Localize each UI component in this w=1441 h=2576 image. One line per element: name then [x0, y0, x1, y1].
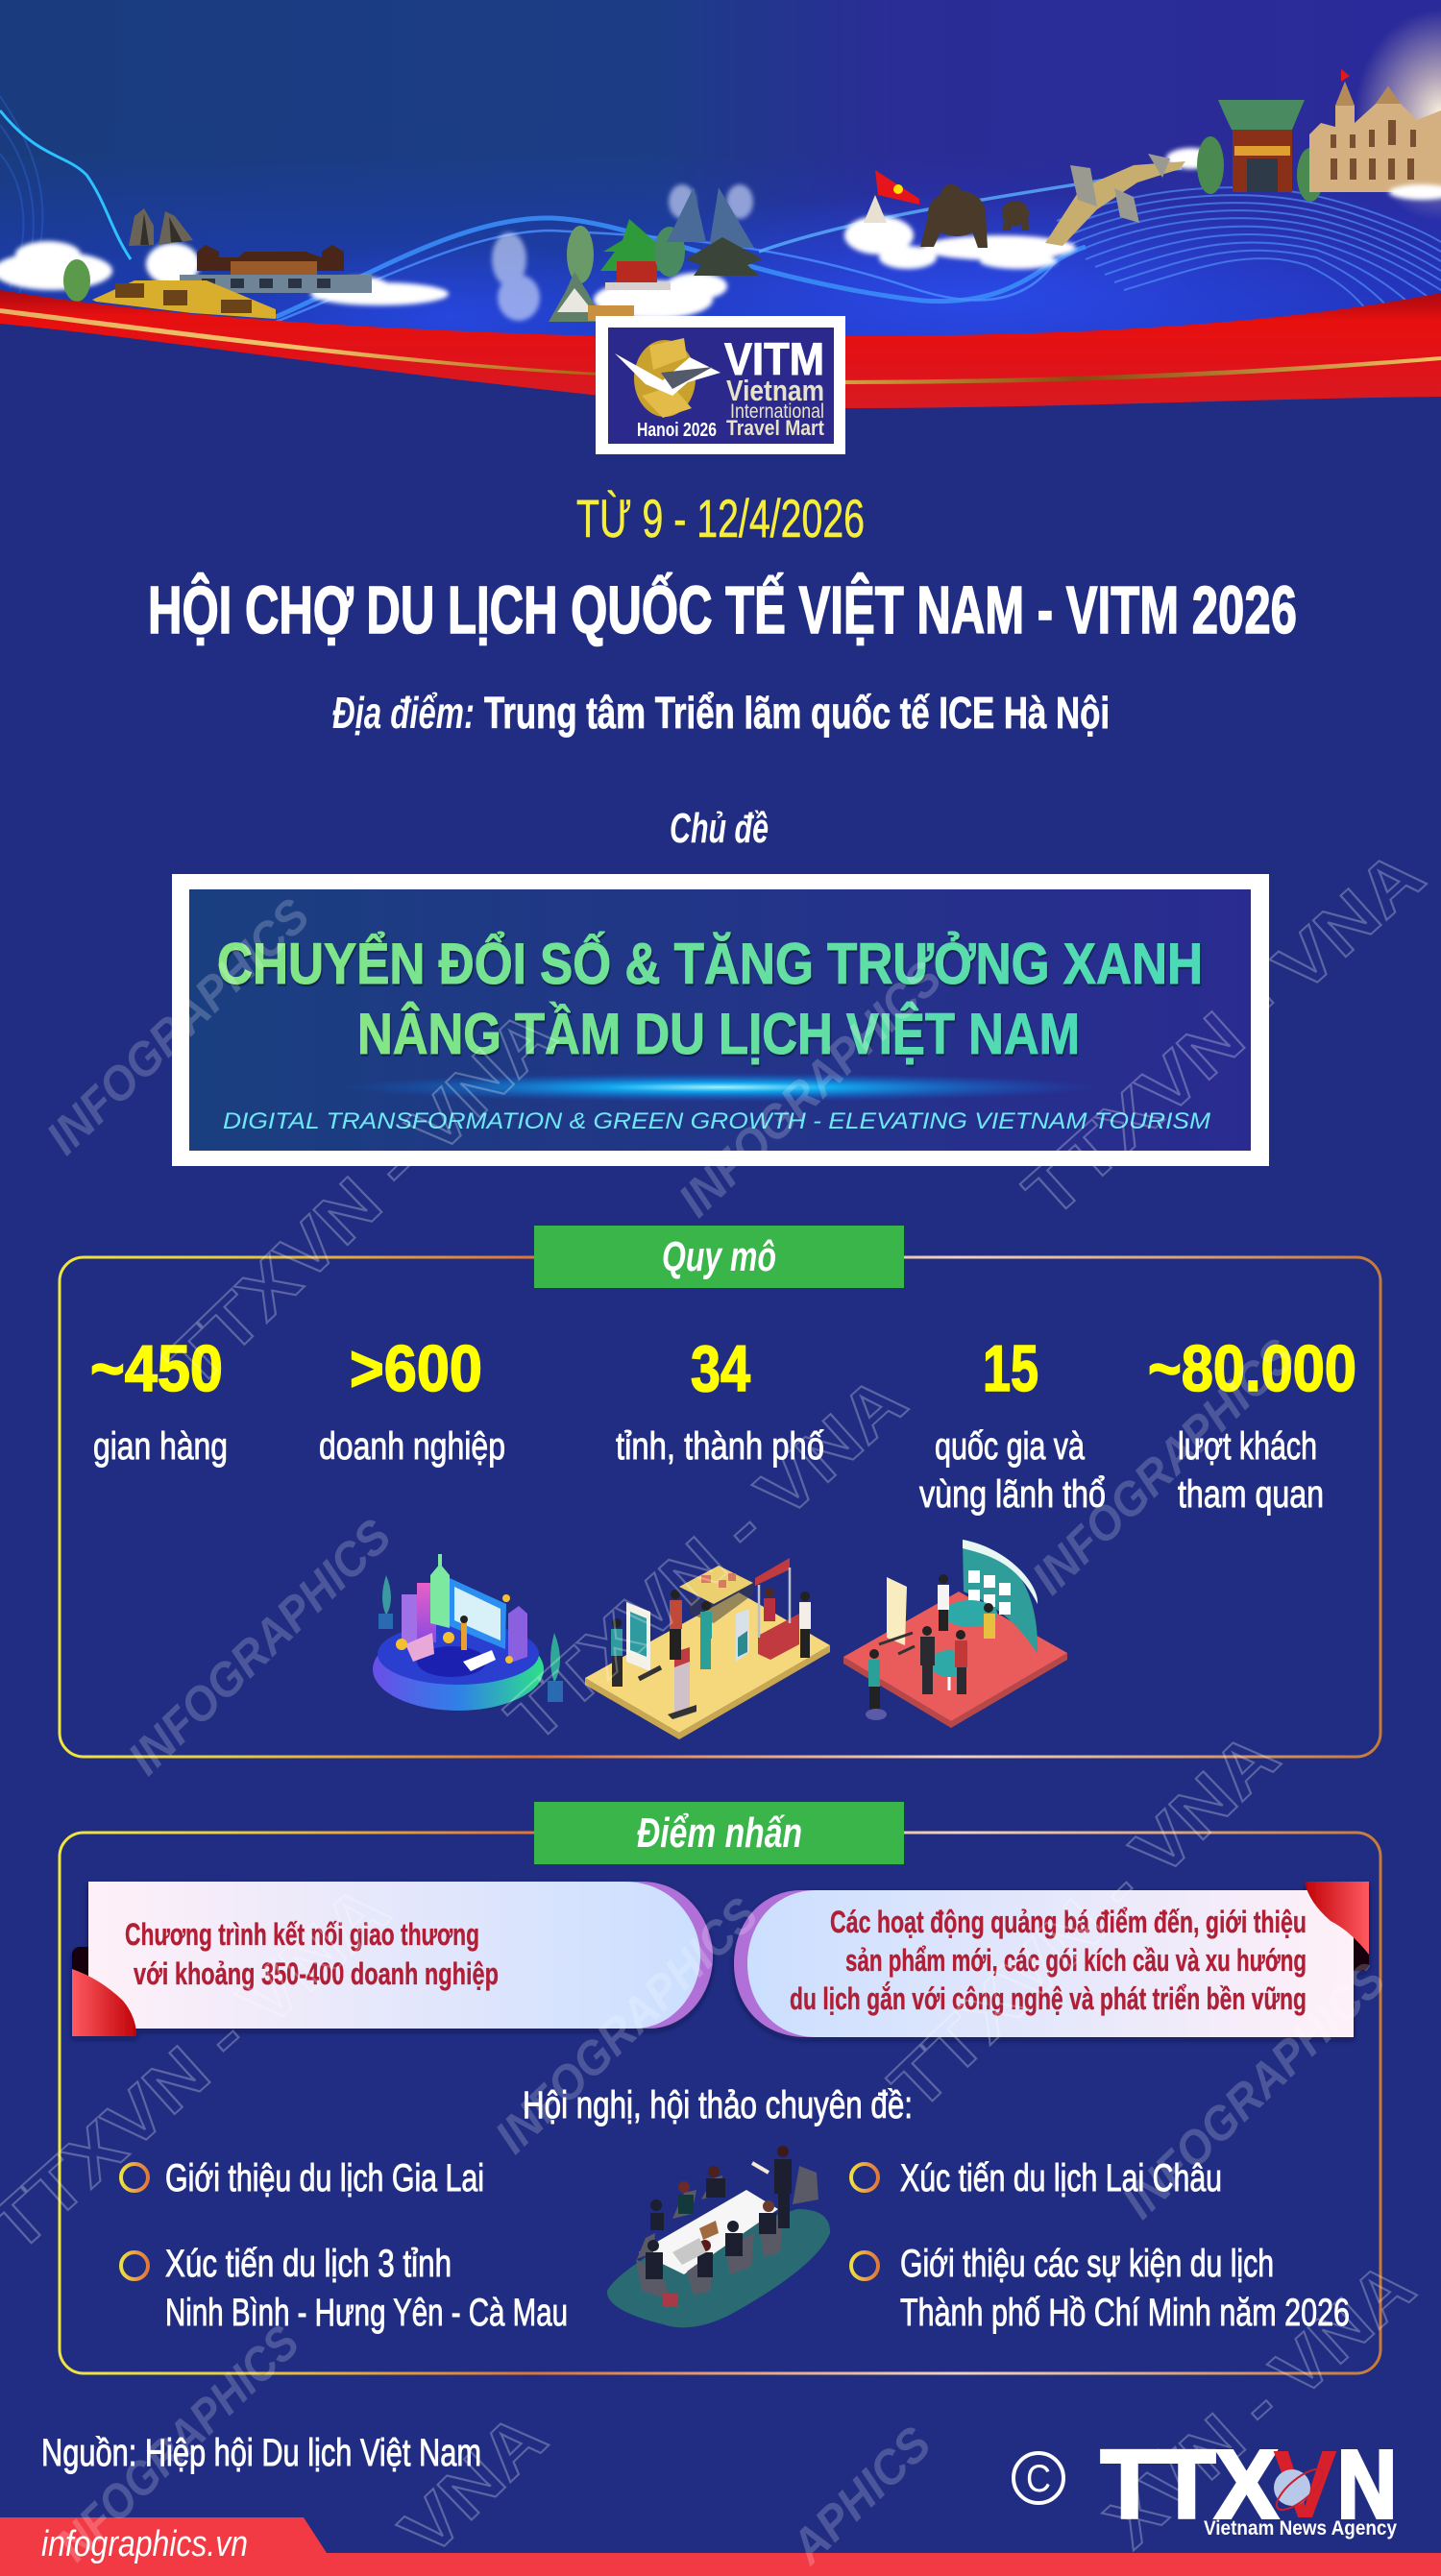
icon: meeting stand red — [843, 1540, 1067, 1728]
watermarks: XVN - VNA — [1090, 2246, 1429, 2563]
list item: Hồ Chí Minh: Giới thiệu các sự kiện du lịch — [900, 2243, 1274, 2285]
panel: theme box: NÂNG TẦM DU LỊCH VIỆT NAM — [357, 1002, 1080, 1066]
list item: 3 provinces — [121, 2243, 568, 2334]
source: Nguồn: Hiệp hội Du lịch Việt Nam — [41, 2432, 481, 2474]
VITM logo: Hanoi 2026 — [637, 420, 717, 441]
watermarks: TTXVN - VNA — [151, 994, 571, 1403]
callout: trade connection — [72, 1882, 713, 2036]
light beam — [341, 1073, 1100, 1102]
icon: gold swirl and bird — [615, 338, 720, 418]
icon: copyright — [1014, 2453, 1063, 2503]
TTXVN logo: Vietnam News Agency — [1204, 2517, 1397, 2540]
icon: exhibition stand yellow — [585, 1558, 830, 1739]
VITM logo: VITM — [724, 333, 824, 384]
VITM logo: International — [730, 401, 824, 423]
list item: Gia Lai — [121, 2157, 484, 2199]
venue — [332, 688, 1110, 738]
VITM logo: Travel Mart — [726, 416, 825, 440]
watermarks: TTXVN - VNA — [874, 1716, 1294, 2126]
heading: Quy mô: Quy mô — [662, 1233, 776, 1280]
stat: gian hàng — [90, 1332, 228, 1468]
panel: Điểm nhấn — [60, 1802, 1380, 2373]
footer band — [0, 2517, 1441, 2576]
clouds — [0, 148, 1216, 319]
gate — [1218, 100, 1305, 130]
stat: doanh nghiệp: >600 — [350, 1332, 482, 1405]
list item: Gia Lai: Giới thiệu du lịch Gia Lai — [165, 2157, 484, 2199]
watermarks: APHICS — [779, 2417, 941, 2575]
stat: lượt khách: lượt khách — [1178, 1425, 1317, 1468]
watermarks: INFOGRAPHICS — [37, 888, 320, 1165]
stat: quốc gia: vùng lãnh thổ — [919, 1473, 1106, 1516]
stat: doanh nghiệp — [319, 1332, 505, 1468]
list item: 3 provinces: Xúc tiến du lịch 3 tỉnh — [165, 2243, 452, 2285]
list item: Hồ Chí Minh — [851, 2243, 1350, 2334]
watermarks: TTXVN - VNA — [491, 1360, 921, 1758]
pagoda — [600, 219, 660, 271]
heading: Điểm nhấn — [534, 1802, 904, 1864]
list item: Lai Châu: Xúc tiến du lịch Lai Châu — [900, 2157, 1222, 2199]
flag — [875, 170, 919, 205]
icon: copyright: C — [1026, 2458, 1051, 2500]
stat: lượt khách: tham quan — [1178, 1473, 1324, 1516]
callout: trade connection: Chương trình kết nối giao thương — [125, 1917, 479, 1952]
heading: Quy mô — [534, 1226, 904, 1288]
watermarks: INFOGRAPHICS — [669, 951, 952, 1227]
panel: theme box: DIGITAL TRANSFORMATION & GREEN GROWTH - ELEVATING VIETNAM TOURISM — [223, 1108, 1210, 1134]
venue: Trung tâm Triển lãm quốc tế ICE Hà Nội — [484, 688, 1110, 738]
venue: Địa điểm: — [332, 688, 475, 738]
city hall — [1309, 82, 1441, 192]
rock islands — [129, 208, 193, 246]
elephants — [920, 184, 1029, 248]
icon: digital city disc — [373, 1554, 563, 1711]
stat: quốc gia: 15 — [983, 1332, 1038, 1405]
TTXVN logo: TTX — [1101, 2431, 1278, 2539]
twin towers — [667, 187, 754, 248]
date: TỪ 9 - 12/4/2026 — [576, 488, 865, 548]
stat: tỉnh, thành phố — [616, 1332, 824, 1468]
watermarks: INFOGRAPHICS — [118, 1509, 402, 1786]
VITM logo — [596, 316, 845, 454]
header banner illustration — [0, 0, 1441, 336]
golden bridge — [1045, 161, 1185, 246]
watermarks: INFOGRAPHICS — [1022, 1328, 1306, 1605]
heading: Điểm nhấn: Điểm nhấn — [637, 1810, 802, 1857]
TTXVN logo: N — [1337, 2431, 1397, 2539]
theme label: Chủ đề — [670, 805, 769, 852]
list item: Lai Châu — [851, 2157, 1222, 2199]
watermarks: NFOGRAPHICS — [46, 2315, 309, 2571]
stat: gian hàng: gian hàng — [93, 1425, 228, 1468]
stat: quốc gia — [919, 1332, 1106, 1516]
stat: lượt khách: ~80.000 — [1148, 1332, 1356, 1405]
stat: lượt khách — [1148, 1332, 1356, 1516]
watermarks: INFOGRAPHICS — [1112, 1953, 1396, 2229]
stat: tỉnh, thành phố: 34 — [691, 1332, 750, 1405]
list item: 3 provinces: Ninh Bình - Hưng Yên - Cà Mau — [165, 2292, 568, 2334]
subheading: Hội nghị, hội thảo chuyên đề: — [523, 2084, 913, 2126]
panel: theme box: CHUYỂN ĐỔI SỐ & TĂNG TRƯỞNG XANH — [217, 932, 1203, 996]
VITM logo: Vietnam — [726, 374, 824, 407]
footer band: infographics.vn — [41, 2524, 248, 2564]
stat: quốc gia: quốc gia và — [935, 1425, 1086, 1468]
panel: Quy mô — [60, 1226, 1380, 1757]
watermarks: INFOGRAPHICS — [485, 1887, 769, 2164]
stat: doanh nghiệp: doanh nghiệp — [319, 1425, 505, 1468]
TTXVN logo — [1014, 2431, 1397, 2540]
watermarks: VNA — [385, 2397, 561, 2571]
panel: theme box — [172, 874, 1269, 1166]
stat: tỉnh, thành phố: tỉnh, thành phố — [616, 1425, 824, 1468]
old town — [92, 280, 276, 319]
callout: trade connection: với khoảng 350-400 doanh nghiệp — [134, 1956, 499, 1991]
icon: boardroom meeting — [607, 2146, 830, 2327]
TTXVN logo: V — [1273, 2431, 1337, 2539]
palace — [180, 275, 372, 293]
callout: promotion activities — [734, 1882, 1369, 2037]
red ribbon — [0, 290, 1441, 408]
watermarks — [0, 835, 1439, 2575]
stat: gian hàng: ~450 — [90, 1332, 223, 1405]
watermarks: TTXVN - VNA — [1009, 835, 1439, 1232]
